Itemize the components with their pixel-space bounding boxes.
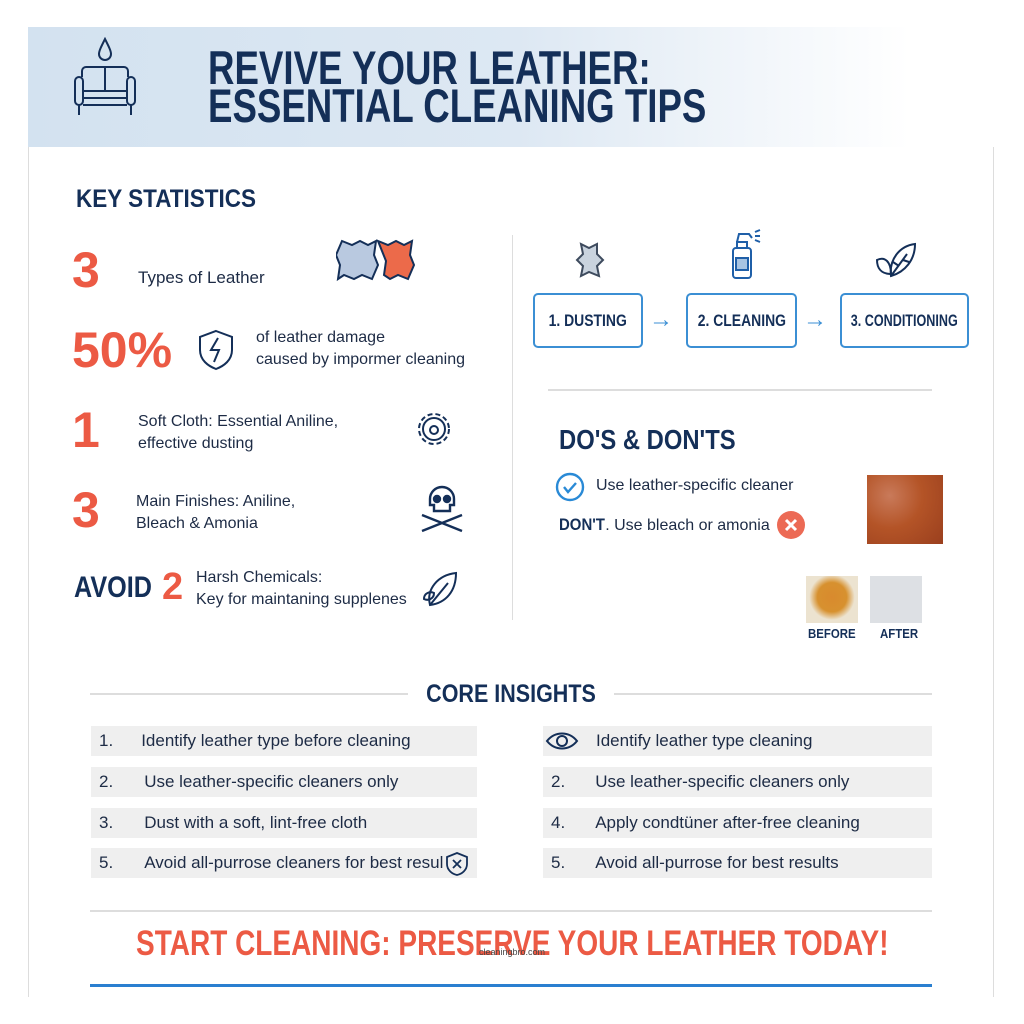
stat 4: 3 bbox=[72, 482, 100, 538]
before after bbox=[806, 576, 922, 641]
stat 2: of leather damage bbox=[256, 329, 385, 346]
icon: hide bbox=[576, 242, 604, 278]
do item: Use leather-specific cleaner bbox=[596, 477, 793, 494]
icon: shield bbox=[199, 330, 233, 370]
stat 4: Main Finishes: Aniline, bbox=[136, 493, 295, 510]
insights right: 4. Apply condtüner after-free cleaning bbox=[551, 813, 860, 832]
heading: dos and donts: DO'S & DON'TS bbox=[559, 424, 736, 455]
title bbox=[208, 41, 706, 132]
stat 2: 50% bbox=[72, 322, 172, 378]
call to action: START CLEANING: PRESERVE YOUR LEATHER TODAY! bbox=[136, 924, 888, 963]
do item bbox=[556, 472, 794, 502]
stat 3 bbox=[72, 402, 450, 458]
insights left: 5. Avoid all-purrose cleaners for best resul bbox=[99, 853, 443, 872]
icon: skull bbox=[422, 486, 462, 532]
image: leather swatch bbox=[867, 475, 943, 544]
insights left bbox=[91, 726, 477, 878]
insights left: 1. Identify leather type before cleaning bbox=[99, 731, 411, 750]
insights right: Identify leather type cleaning bbox=[596, 731, 812, 750]
step 2 bbox=[686, 293, 797, 348]
stat 1 bbox=[72, 239, 415, 298]
stat 5: 2 bbox=[162, 566, 183, 608]
header band bbox=[28, 27, 1008, 147]
insights left: 3. Dust with a soft, lint-free cloth bbox=[99, 813, 367, 832]
dont item: DON'T bbox=[559, 515, 605, 534]
divider vertical bbox=[512, 235, 513, 620]
stat 5: Key for maintaning supplenes bbox=[196, 591, 407, 608]
arrow: → bbox=[649, 306, 673, 333]
icon: leaves bbox=[876, 242, 916, 278]
process step icons bbox=[576, 229, 916, 279]
stat 5: AVOID bbox=[74, 571, 152, 604]
frame bbox=[28, 147, 994, 997]
step 3: 3. CONDITIONING bbox=[851, 311, 958, 330]
stat 1: 3 bbox=[72, 242, 100, 298]
stat 5 bbox=[74, 566, 457, 608]
stat 5: Harsh Chemicals: bbox=[196, 569, 322, 586]
icon: leaf bbox=[423, 572, 457, 606]
stat 4 bbox=[72, 482, 462, 538]
stat 3: 1 bbox=[72, 402, 100, 458]
insights left: 2. Use leather-specific cleaners only bbox=[99, 772, 398, 791]
title: REVIVE YOUR LEATHER: bbox=[208, 41, 651, 94]
before after: AFTER bbox=[880, 626, 918, 641]
step 3 bbox=[840, 293, 969, 348]
icon: gear bbox=[418, 413, 450, 445]
before after: BEFORE bbox=[808, 626, 856, 641]
icon: sofa with drop bbox=[74, 37, 136, 115]
watermark: cleaningbro.com bbox=[479, 947, 545, 957]
title: ESSENTIAL CLEANING TIPS bbox=[208, 79, 706, 132]
dont item bbox=[559, 511, 805, 539]
stat 4: Bleach & Amonia bbox=[136, 515, 258, 532]
icon: leather hides bbox=[336, 239, 415, 282]
stat 3: Soft Cloth: Essential Aniline, bbox=[138, 413, 338, 430]
heading: key statistics: KEY STATISTICS bbox=[76, 185, 256, 213]
stat 2 bbox=[72, 322, 465, 378]
arrow: → bbox=[803, 306, 827, 333]
step 1 bbox=[533, 293, 643, 348]
core insights heading: CORE INSIGHTS bbox=[426, 680, 596, 708]
icon: spray bbox=[732, 229, 760, 279]
stat 2: caused by impormer cleaning bbox=[256, 351, 465, 368]
stat 1: Types of Leather bbox=[138, 268, 265, 287]
insights right: 5. Avoid all-purrose for best results bbox=[551, 853, 839, 872]
insights right: 2. Use leather-specific cleaners only bbox=[551, 772, 849, 791]
step 2: 2. CLEANING bbox=[698, 311, 786, 330]
stat 3: effective dusting bbox=[138, 435, 253, 452]
insights right bbox=[543, 726, 932, 878]
step 1: 1. DUSTING bbox=[549, 311, 627, 330]
dont item: . Use bleach or amonia bbox=[605, 517, 770, 534]
